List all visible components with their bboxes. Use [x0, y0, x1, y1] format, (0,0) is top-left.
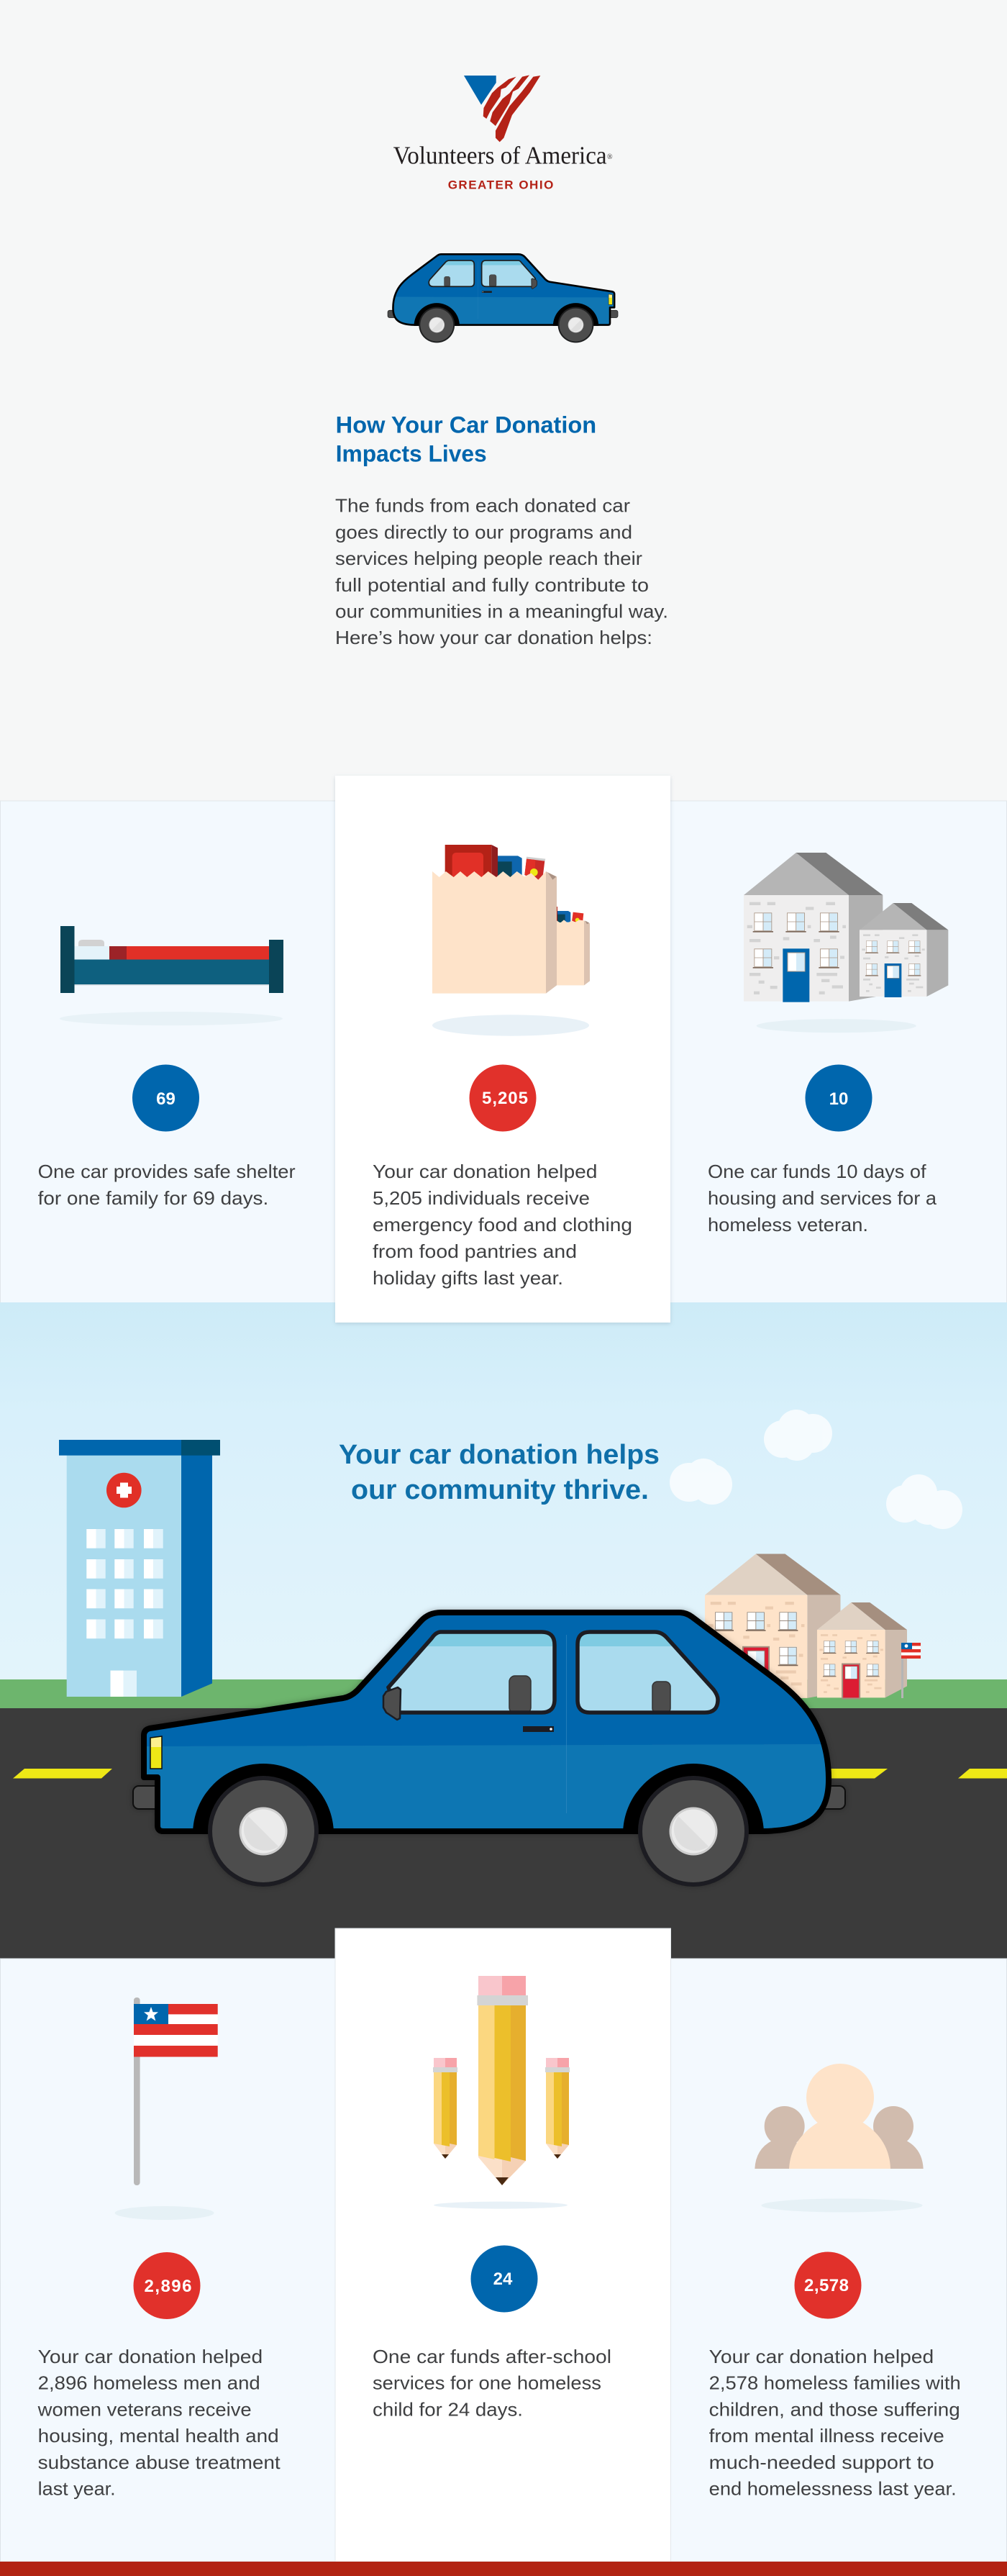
text block: veterans: housing, mental health and	[38, 2425, 279, 2446]
text block: families: 2,578 homeless families with	[709, 2372, 961, 2394]
text block: veterans: women veterans receive	[37, 2398, 252, 2420]
text block: food: 5,205 individuals receive	[373, 1187, 590, 1209]
intro text: goes directly to our programs and	[335, 521, 632, 543]
text block: food: emergency food and clothing	[373, 1214, 632, 1235]
number badge: 24: 24	[493, 2269, 513, 2289]
panel: houses / veteran housing	[708, 853, 948, 1235]
number badge: 2,896: 2,896	[144, 2277, 191, 2296]
small pencil left	[433, 2058, 457, 2159]
panel: impact row 1 background	[0, 801, 1007, 1303]
text block: families: Your car donation helped	[709, 2346, 934, 2367]
text block: veterans: 2,896 homeless men and	[38, 2372, 260, 2394]
number badge: 5,205	[469, 1065, 537, 1131]
footer bar	[0, 2562, 1007, 2576]
icon: small flag	[901, 1643, 921, 1698]
logo wordmark: Volunteers of America	[393, 142, 607, 170]
text block: veteran housing: housing and services for a	[708, 1187, 937, 1209]
text block: families	[709, 2346, 961, 2500]
text block: food: from food pantries and	[373, 1241, 577, 1262]
panel: food / center card row 1	[335, 776, 670, 1323]
intro heading: How Your Car Donation	[336, 412, 596, 438]
text block: shelter: for one family for 69 days.	[38, 1187, 268, 1209]
intro text: services helping people reach their	[335, 548, 642, 569]
number badge: 10: 10	[829, 1089, 848, 1109]
intro text: The funds from each donated car	[335, 495, 630, 517]
icon: small blue car	[388, 254, 618, 343]
bed shadow	[60, 1012, 283, 1025]
icon: flag	[134, 1997, 218, 2185]
clouds	[670, 1410, 962, 1529]
panel: people / families	[709, 2064, 961, 2500]
sky	[0, 1302, 1007, 1679]
icon: people	[755, 2064, 924, 2169]
number badge: 10	[806, 1065, 872, 1131]
text block: veteran housing: homeless veteran.	[708, 1214, 868, 1235]
flag shadow	[115, 2206, 214, 2220]
pencils shadow	[434, 2202, 568, 2209]
text block: families: end homelessness last year.	[709, 2478, 957, 2500]
number badge: 5,205: 5,205	[482, 1089, 528, 1108]
text block: veterans: last year.	[38, 2478, 116, 2500]
text block: veteran housing: One car funds 10 days of	[708, 1161, 926, 1182]
registered mark: ®	[607, 153, 613, 161]
text block: families: children, and those suffering	[709, 2398, 960, 2420]
large bag contents	[445, 845, 545, 881]
number badge: 2,578: 2,578	[804, 2276, 849, 2295]
houses shadow	[757, 1019, 916, 1033]
text block: veteran housing	[708, 1161, 937, 1235]
intro text: our communities in a meaningful way.	[335, 600, 668, 622]
icon: grey houses	[744, 853, 948, 1002]
number badge: 2,578	[794, 2252, 862, 2318]
heading: community thrive: our community thrive.	[351, 1475, 649, 1505]
panel: impact row 2 background	[0, 1959, 1007, 2562]
number badge: 69: 69	[156, 1089, 176, 1109]
text block: after-school: services for one homeless	[373, 2372, 601, 2394]
text block: shelter: One car provides safe shelter	[38, 1161, 296, 1182]
large pencil	[477, 1976, 528, 2185]
logo: Volunteers of America Greater Ohio	[393, 75, 613, 192]
heading: community thrive	[339, 1440, 660, 1505]
icon: bed	[60, 926, 283, 993]
heading: community thrive: Your car donation helps	[339, 1440, 660, 1470]
icon: peach houses	[705, 1554, 907, 1699]
intro heading: Impacts Lives	[336, 441, 487, 467]
small pencil right	[545, 2058, 570, 2159]
road dashes	[13, 1769, 1007, 1779]
text block: food: Your car donation helped	[373, 1161, 597, 1182]
large bag	[432, 871, 557, 994]
small bag	[557, 907, 590, 985]
scene: community street	[0, 1302, 1007, 1959]
text block: families: from mental illness receive	[709, 2425, 944, 2446]
text block: veterans: substance abuse treatment	[38, 2452, 281, 2473]
logo subtitle: GREATER OHIO	[448, 178, 553, 192]
icon: grocery bags	[432, 845, 590, 994]
number badge: 2,896	[134, 2252, 200, 2319]
panel: pencils / after-school center card	[335, 1928, 670, 2562]
text block: after-school: child for 24 days.	[373, 2398, 523, 2420]
background: top section	[0, 0, 1007, 801]
icon: large blue car	[133, 1613, 845, 1887]
number badge: 69	[132, 1065, 199, 1131]
text block: families: much-needed support to	[709, 2452, 934, 2473]
text block: after-school	[373, 2346, 611, 2420]
icon: pencils	[433, 1976, 570, 2185]
number badge: 24	[470, 2245, 538, 2313]
text block: food	[373, 1161, 632, 1289]
intro text: Here’s how your car donation helps:	[335, 627, 652, 648]
bags shadow	[432, 1015, 589, 1036]
icon: blue triangle and red strokes	[464, 75, 540, 142]
intro heading	[336, 412, 596, 467]
text block: shelter	[38, 1161, 296, 1209]
panel: bed / shelter	[38, 926, 296, 1209]
people shadow	[761, 2199, 922, 2212]
text block: veterans	[37, 2346, 281, 2500]
text block: veterans: Your car donation helped	[38, 2346, 263, 2367]
road	[0, 1708, 1007, 1959]
text block: food: holiday gifts last year.	[373, 1267, 563, 1289]
intro text	[335, 495, 668, 648]
intro text: full potential and fully contribute to	[335, 574, 649, 596]
icon: hospital	[59, 1440, 220, 1697]
grass	[0, 1679, 1007, 1708]
text block: after-school: One car funds after-school	[373, 2346, 611, 2367]
panel: flag / veterans	[37, 1997, 281, 2500]
